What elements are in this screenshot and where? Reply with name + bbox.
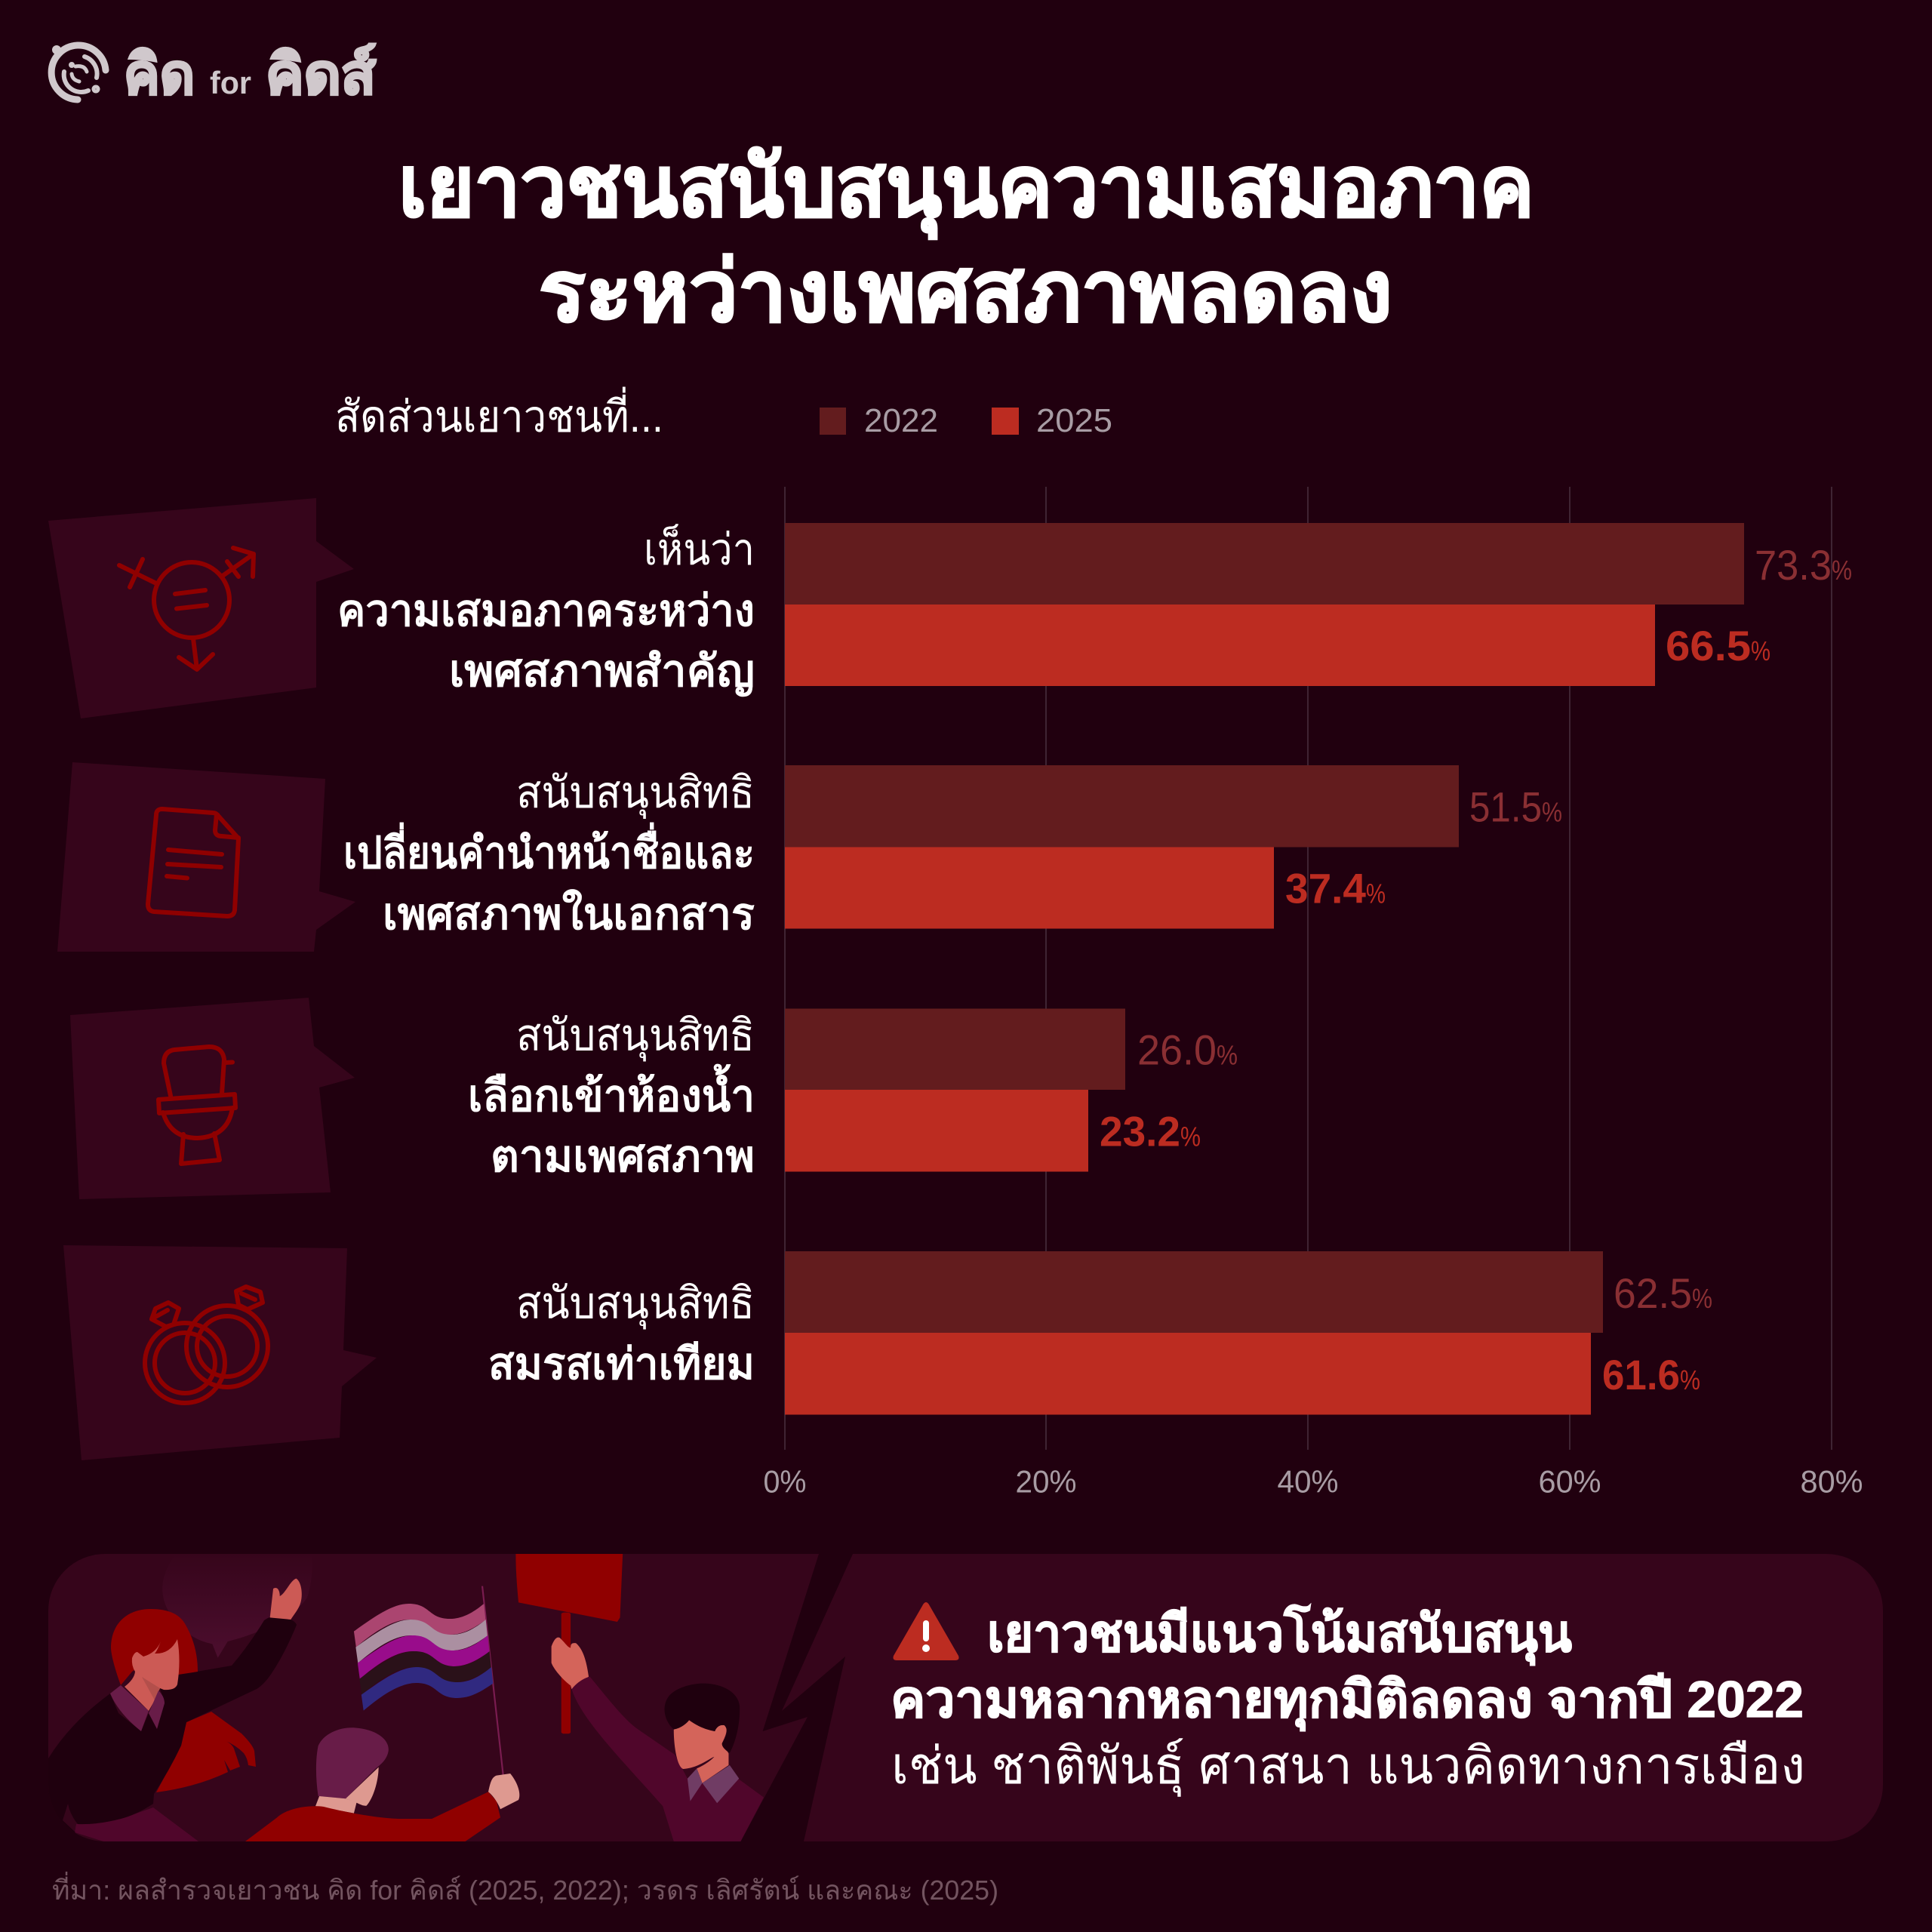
legend: 2025 <box>1036 402 1112 439</box>
source footnote: ที่มา: ผลสำรวจเยาวชน คิด for คิดส์ (2025, 2022); วรดร เลิศรัตน์ และคณะ (2025) <box>52 1872 998 1906</box>
illustration: protest crowd <box>48 1554 764 1841</box>
row 3: value 2022: 26.0 <box>1137 1026 1217 1073</box>
row 3: label <box>468 1011 755 1181</box>
panel: gender symbol icon card <box>48 498 354 718</box>
row 2: label <box>343 768 755 939</box>
logo: คิด for คิดส์ <box>51 43 377 106</box>
panel: toilet icon card <box>70 998 355 1199</box>
row 1: value 2025: 66.5 <box>1666 622 1751 669</box>
row 3: value 2025: % <box>1180 1121 1201 1152</box>
row 2: label: สนับสนุนสิทธิ <box>516 768 755 820</box>
row 3: value 2022: % <box>1217 1040 1238 1070</box>
title: เยาวชนสนับสนุนความเสมอภาค <box>398 140 1534 240</box>
row 2: value 2025: 37.4 <box>1285 865 1366 912</box>
callout text: เช่น ชาติพันธุ์ ศาสนา แนวคิดทางการเมือง <box>891 1737 1805 1797</box>
x axis labels: 60% <box>1538 1464 1601 1499</box>
row 4: bars <box>785 1251 1603 1414</box>
row 1: value 2025: % <box>1751 635 1770 666</box>
row 1: value 2022: 73.3 <box>1755 541 1832 589</box>
row 2: value 2022: 51.5 <box>1469 783 1542 830</box>
panel: document icon card <box>57 762 355 952</box>
row 1: label: เห็นว่า <box>644 524 755 574</box>
x axis labels: 0% <box>764 1464 806 1499</box>
lightning divider <box>741 1554 853 1841</box>
callout text: เยาวชนมีแนวโน้มสนับสนุน <box>987 1604 1572 1666</box>
row 1: label <box>337 524 755 697</box>
legend: 2022 <box>864 402 938 439</box>
row 1: label: เพศสภาพสำคัญ <box>449 647 755 697</box>
logo: คิด for คิดส์: คิดส์ <box>266 43 377 106</box>
legend <box>820 402 1112 439</box>
panel: callout banner <box>48 1554 1883 1841</box>
icon: wedding rings <box>145 1287 268 1403</box>
icon: transgender symbol <box>119 548 254 669</box>
logo: คิด for คิดส์: คิด <box>124 43 195 106</box>
logo: คิด for คิดส์: for <box>210 65 251 100</box>
row 3: label: สนับสนุนสิทธิ <box>516 1011 755 1063</box>
row 4: label: สนับสนุนสิทธิ <box>516 1278 755 1330</box>
icon: toilet <box>158 1047 235 1164</box>
row 4: value 2022: 62.5 <box>1614 1269 1692 1317</box>
row 3: label: ตามเพศสภาพ <box>491 1132 755 1181</box>
row 3: value 2025: 23.2 <box>1100 1108 1180 1155</box>
row 3: label: เลือกเข้าห้องน้ำ <box>468 1064 755 1121</box>
row 4: value 2025: % <box>1680 1364 1700 1395</box>
row 2: label: เปลี่ยนคำนำหน้าชื่อและ <box>343 822 755 878</box>
title <box>398 140 1534 339</box>
row 4: value 2025: 61.6 <box>1602 1351 1680 1398</box>
bar chart <box>337 487 1863 1499</box>
row 1: label: ความเสมอภาคระหว่าง <box>337 586 755 635</box>
row 2: value 2025: % <box>1366 878 1386 909</box>
row 2: label: เพศสภาพในเอกสาร <box>383 888 755 939</box>
row 1: bars <box>785 523 1744 686</box>
title: ระหว่างเพศสภาพลดลง <box>539 245 1392 339</box>
row 4: label <box>488 1278 755 1389</box>
icon: warning triangle <box>894 1602 958 1660</box>
row 3: bars <box>785 1008 1125 1171</box>
x axis labels <box>764 1464 1863 1499</box>
row 4: label: สมรสเท่าเทียม <box>488 1340 755 1389</box>
row 2: bars <box>785 765 1459 928</box>
x axis labels: 40% <box>1277 1464 1339 1499</box>
chart subtitle: สัดส่วนเยาวชนที่... <box>335 386 663 441</box>
icon: logo spiral <box>51 45 106 100</box>
row 2: value 2022: % <box>1542 797 1562 827</box>
callout text: ความหลากหลายทุกมิติลดลง จากปี 2022 <box>891 1671 1804 1731</box>
panel: rings icon card <box>63 1245 377 1460</box>
x axis labels: 20% <box>1016 1464 1076 1499</box>
row 4: value 2022: % <box>1692 1283 1712 1314</box>
icon: document <box>148 809 238 916</box>
x axis labels: 80% <box>1801 1464 1863 1499</box>
callout text <box>891 1604 1805 1797</box>
row 1: value 2022: % <box>1832 555 1852 586</box>
